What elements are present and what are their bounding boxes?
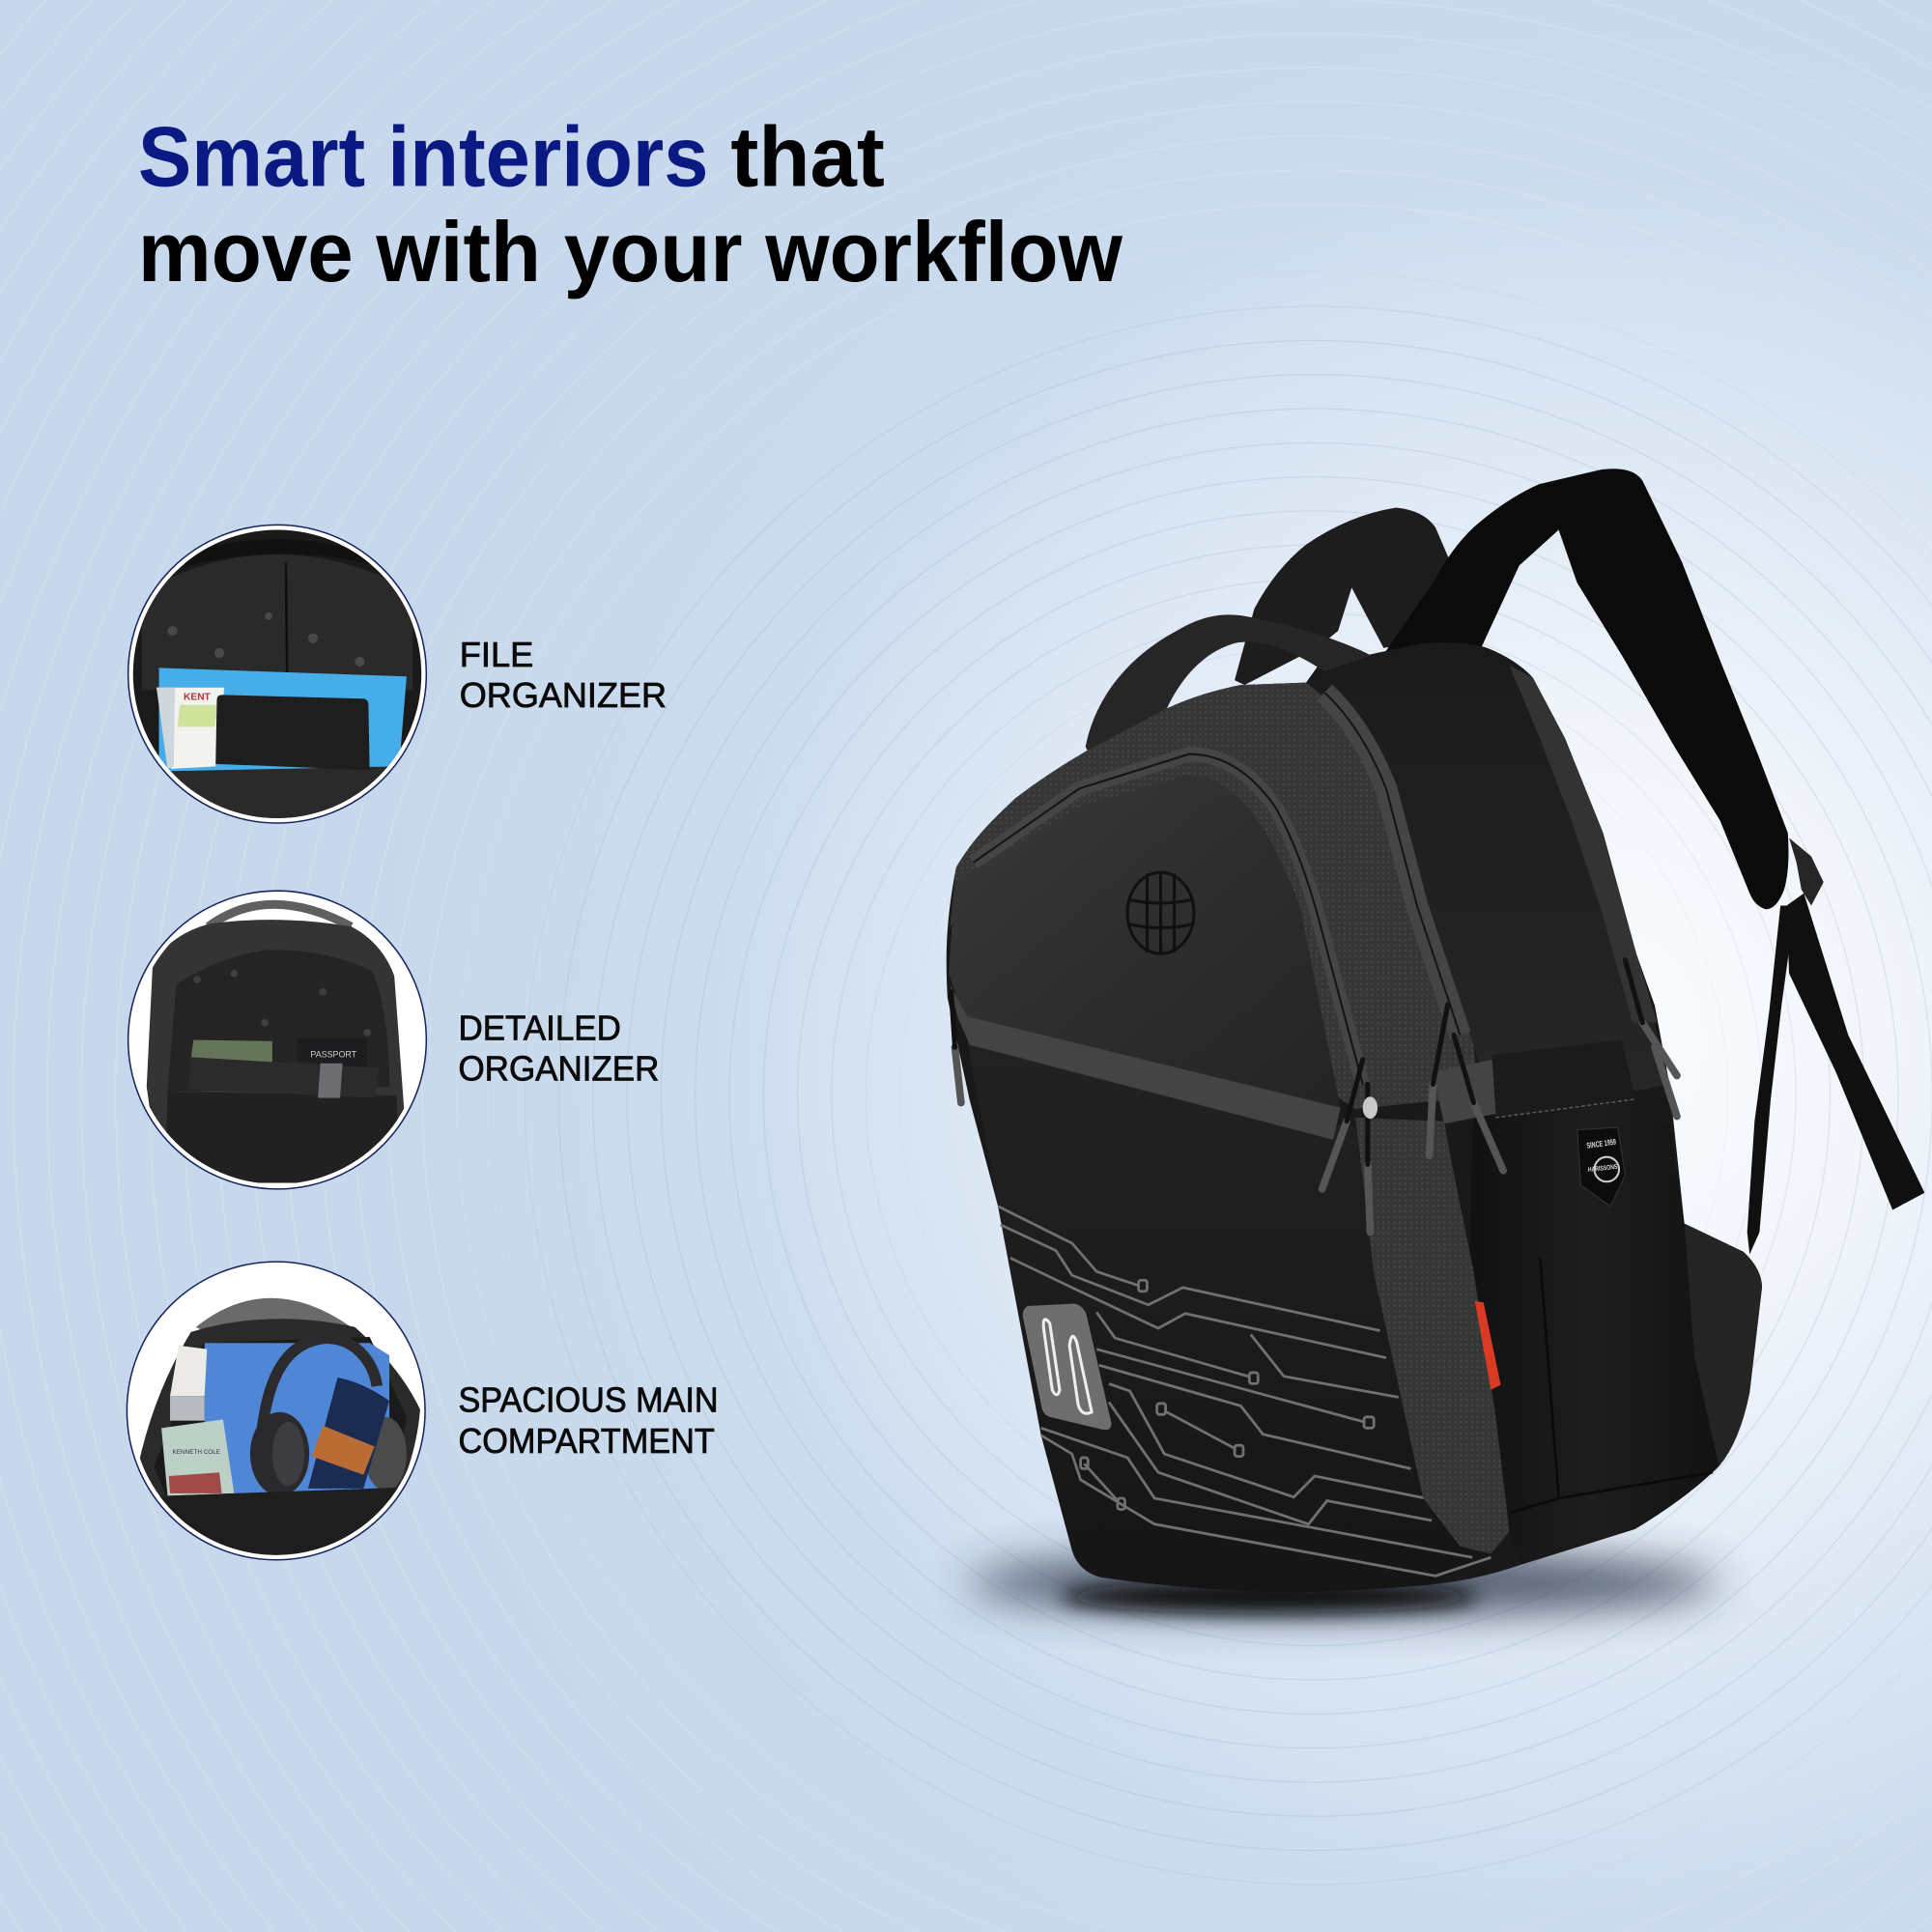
feature: file organizer bbox=[124, 524, 667, 826]
rear zipper band bbox=[1509, 666, 1658, 1023]
photo circle: detailed organizer: PASSPORT bbox=[310, 1049, 357, 1059]
title: that bbox=[730, 109, 885, 205]
logo patch bbox=[1023, 1303, 1112, 1430]
feature: detailed organizer bbox=[128, 891, 659, 1189]
label: file organizer: ORGANIZER bbox=[460, 675, 667, 715]
label: spacious main compartment: SPACIOUS MAIN bbox=[458, 1380, 719, 1420]
buckle bbox=[1789, 838, 1824, 906]
zipper pulls bbox=[952, 960, 1677, 1233]
emblem bbox=[1127, 872, 1194, 953]
mesh rim bbox=[950, 683, 1479, 1109]
photo circle: file organizer bbox=[124, 524, 431, 826]
side panel bbox=[1466, 1084, 1719, 1565]
title: Smart interiors bbox=[138, 109, 708, 205]
feature: spacious main compartment bbox=[124, 1262, 719, 1571]
shoulder strap: near bbox=[1383, 469, 1788, 909]
label: spacious main compartment bbox=[458, 1380, 719, 1461]
upper front pocket bbox=[949, 775, 1341, 1108]
zipper bands bbox=[974, 693, 1460, 1084]
photo circle: spacious main compartment bbox=[124, 1262, 431, 1571]
label: spacious main compartment: COMPARTMENT bbox=[458, 1421, 715, 1461]
label: file organizer: FILE bbox=[460, 635, 533, 674]
photo circle: detailed organizer bbox=[128, 891, 426, 1189]
shoulder strap: far bbox=[1235, 508, 1458, 685]
mesh side pocket bbox=[1685, 1224, 1762, 1466]
label: detailed organizer: DETAILED bbox=[458, 1009, 621, 1048]
title bbox=[138, 109, 1123, 299]
side panel seams bbox=[1509, 1258, 1713, 1513]
badge: SINCE 1959 bbox=[1586, 1137, 1617, 1151]
badge: HARISSONS bbox=[1588, 1164, 1618, 1174]
label: file organizer bbox=[460, 635, 667, 715]
label: detailed organizer: ORGANIZER bbox=[458, 1049, 659, 1089]
photo circle: spacious main compartment: KENNETH COLE bbox=[173, 1449, 220, 1456]
red tag bbox=[1475, 1301, 1501, 1390]
side mesh strip bbox=[1355, 1118, 1509, 1553]
side pocket strap bbox=[1433, 1040, 1636, 1123]
webbing straps bbox=[1747, 894, 1924, 1254]
photo circle: file organizer: KENT bbox=[184, 692, 212, 702]
lower front panel bbox=[967, 1041, 1491, 1592]
label: detailed organizer bbox=[458, 1009, 659, 1089]
title: move with your workflow bbox=[138, 204, 1123, 299]
circuit print bbox=[998, 1207, 1491, 1576]
backpack ground shadow bbox=[967, 1551, 1719, 1615]
body silhouette bbox=[947, 642, 1762, 1592]
carry handle bbox=[1086, 614, 1372, 754]
badge bbox=[1577, 1127, 1625, 1207]
pocket zip band bbox=[950, 984, 1341, 1140]
rear panel bbox=[1306, 642, 1669, 1118]
backpack bbox=[947, 469, 1924, 1592]
